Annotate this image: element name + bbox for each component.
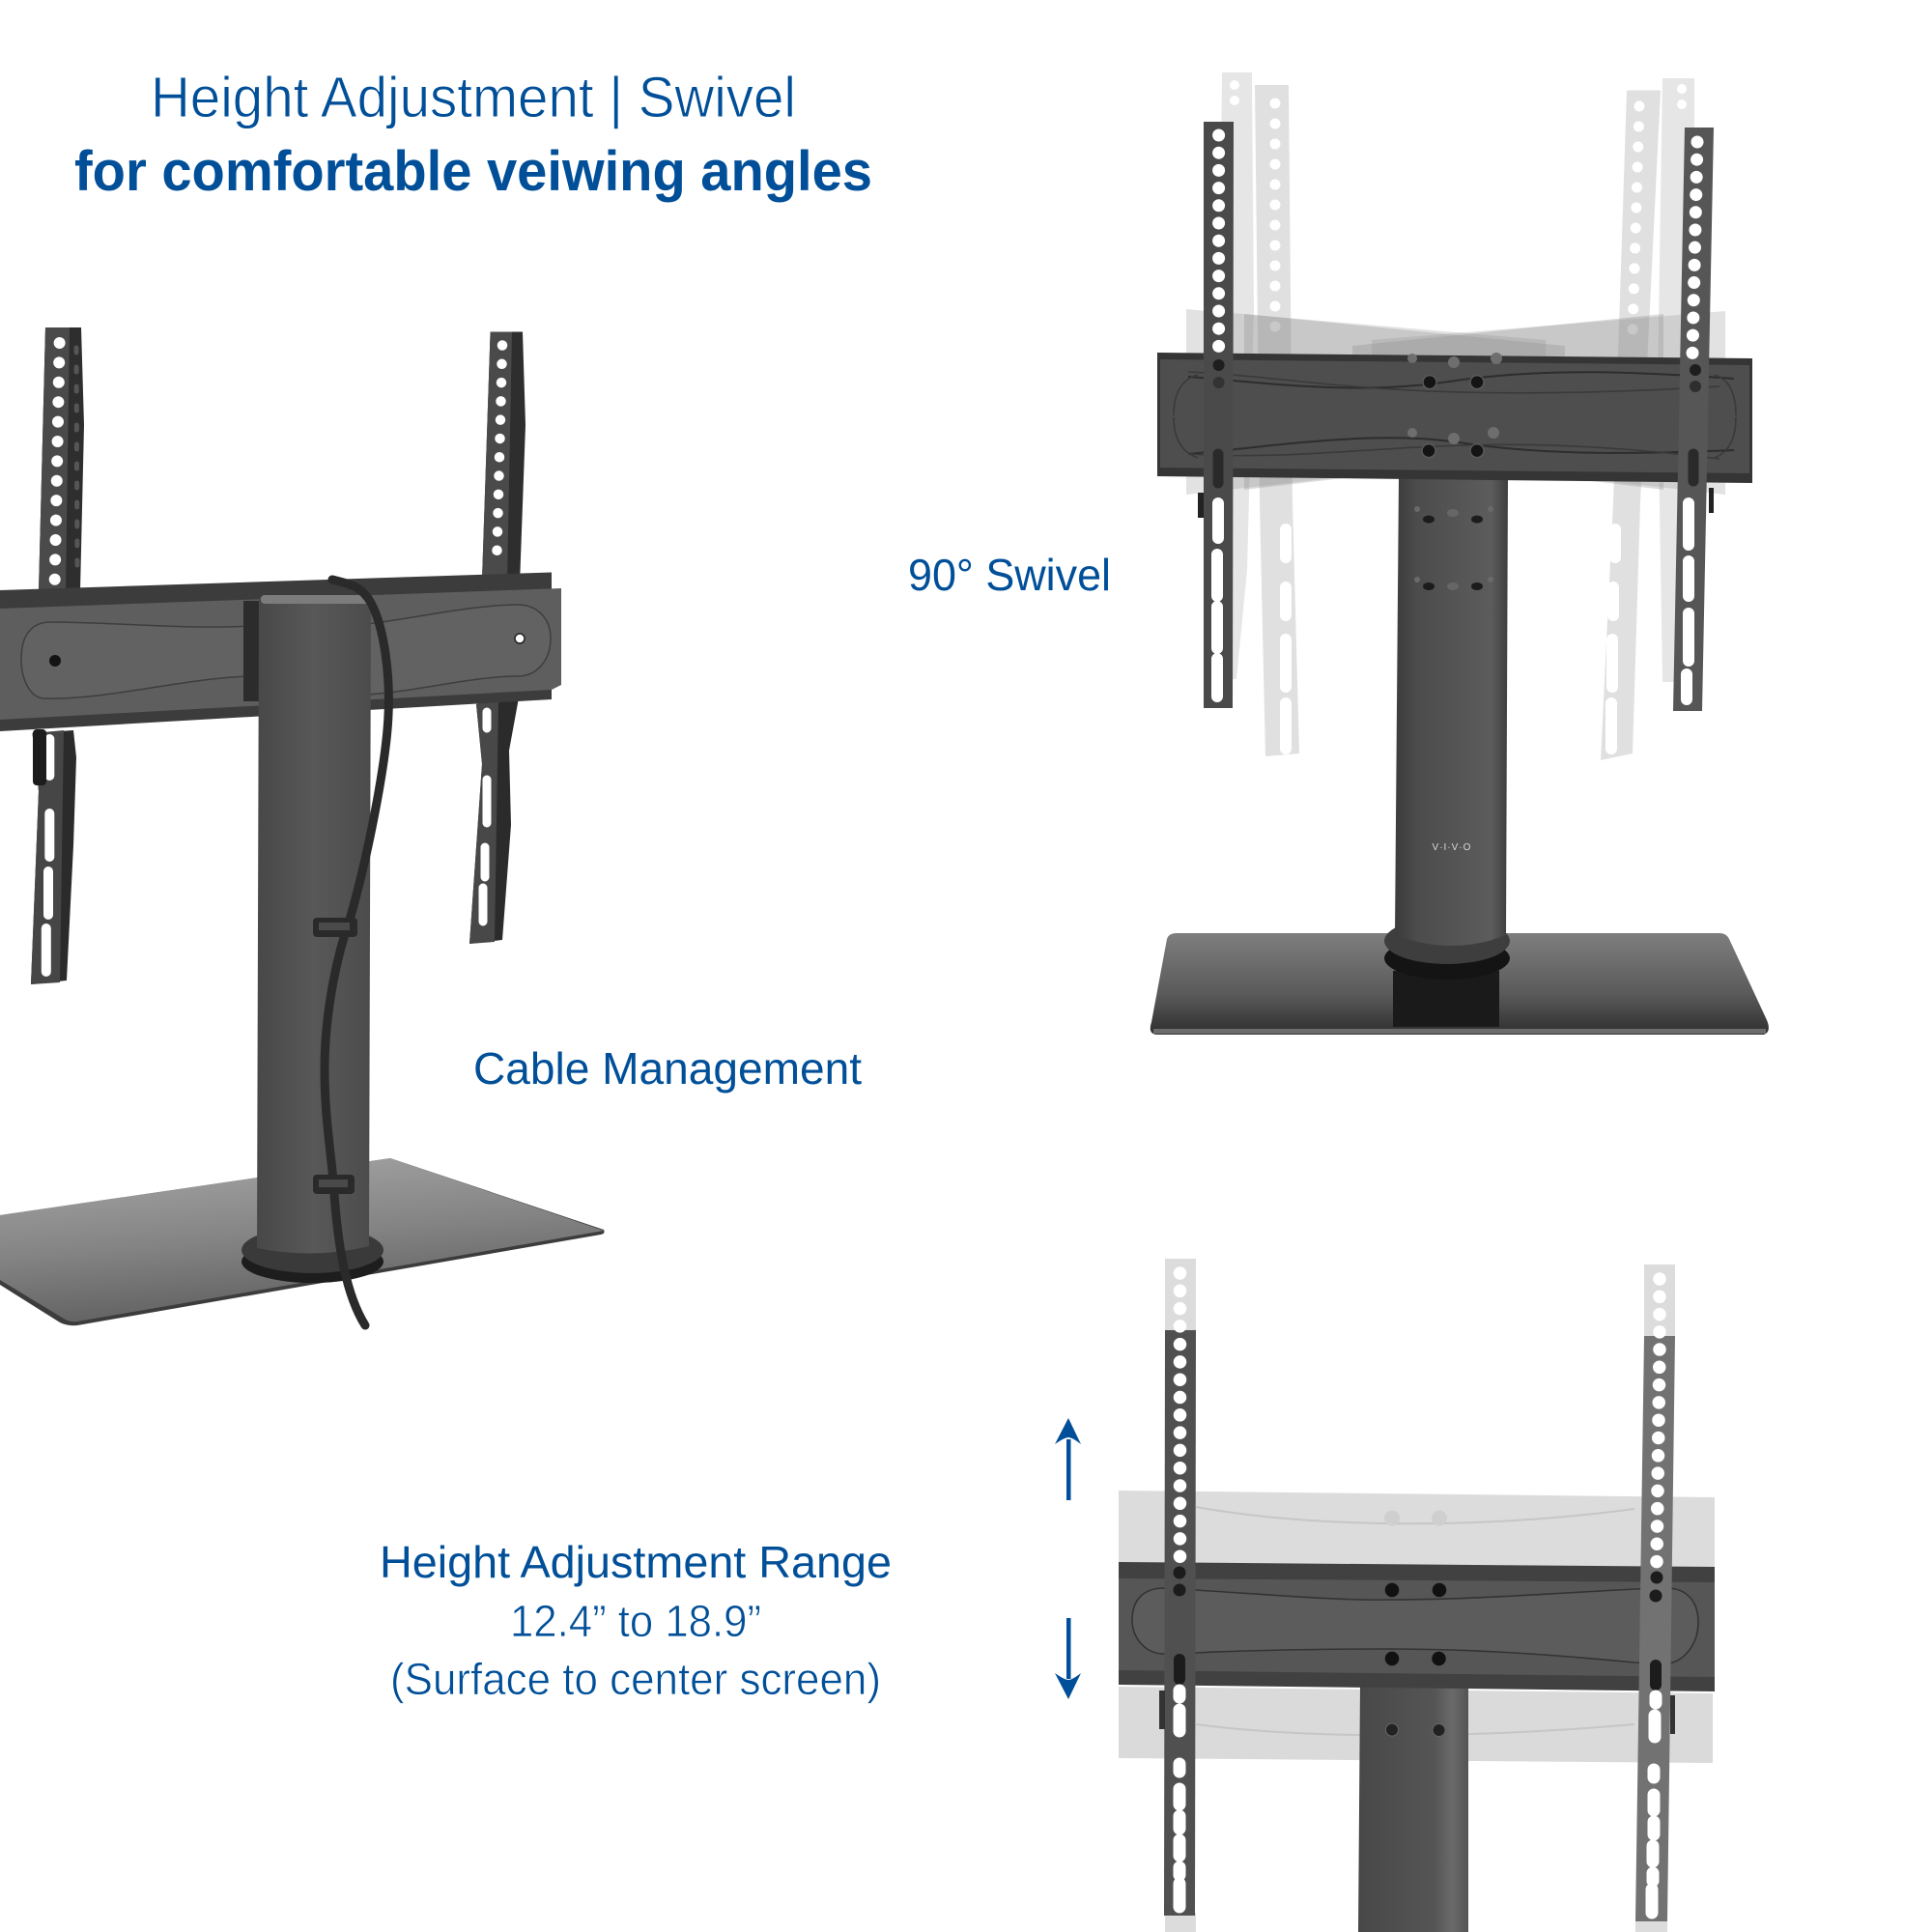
title [74, 66, 872, 203]
ghost swivel crossbars [1186, 309, 1725, 495]
glass base [1151, 933, 1769, 1035]
post mounting holes [1414, 506, 1493, 590]
crossbar [1119, 1562, 1715, 1691]
ghost lowered crossbar [1119, 1687, 1713, 1763]
ghost raised crossbar [1119, 1491, 1715, 1575]
cable clip lower [313, 1175, 355, 1194]
text block: height adjustment range [380, 1537, 892, 1704]
left bracket arm [1159, 1273, 1196, 1916]
ghost bracket tops and tails [1165, 1259, 1675, 1932]
label: 90 degree swivel: 90° Swivel [908, 550, 1111, 600]
range values: 12.4” to 18.9” [510, 1596, 761, 1646]
brand mark: V·I·V·O [1433, 842, 1471, 853]
support post [1358, 1685, 1468, 1932]
ghost post screws [1385, 1723, 1445, 1737]
upper right bracket arm [482, 332, 526, 584]
range note: (Surface to center screen) [390, 1654, 881, 1704]
ghost swivel brackets [1214, 72, 1694, 760]
base collar [242, 1227, 384, 1283]
power cable [325, 580, 388, 1325]
left bracket arm [1198, 122, 1234, 708]
support post [1395, 478, 1508, 946]
panel: height adjustment stand [1055, 1259, 1715, 1932]
base collar [1384, 918, 1510, 1027]
range heading: Height Adjustment Range [380, 1537, 892, 1587]
crossbar [1157, 353, 1752, 483]
lower right bracket arm [469, 693, 520, 944]
title line 2: for comfortable veiwing angles [74, 140, 872, 203]
crossbar [0, 572, 561, 731]
glass base [0, 1158, 605, 1325]
right bracket arm [1635, 1279, 1675, 1921]
right bracket arm [1673, 128, 1714, 711]
upper left bracket arm [39, 327, 84, 591]
panel: swivel stand [1151, 72, 1769, 1035]
arrow: down [1055, 1618, 1081, 1699]
cable clip upper [313, 918, 357, 937]
arrow: up [1055, 1418, 1081, 1500]
label: cable management: Cable Management [473, 1043, 862, 1094]
support post [257, 595, 371, 1254]
panel: cable management stand [0, 327, 605, 1325]
title line 1: Height Adjustment | Swivel [151, 66, 796, 129]
lower left bracket arm [31, 729, 76, 984]
